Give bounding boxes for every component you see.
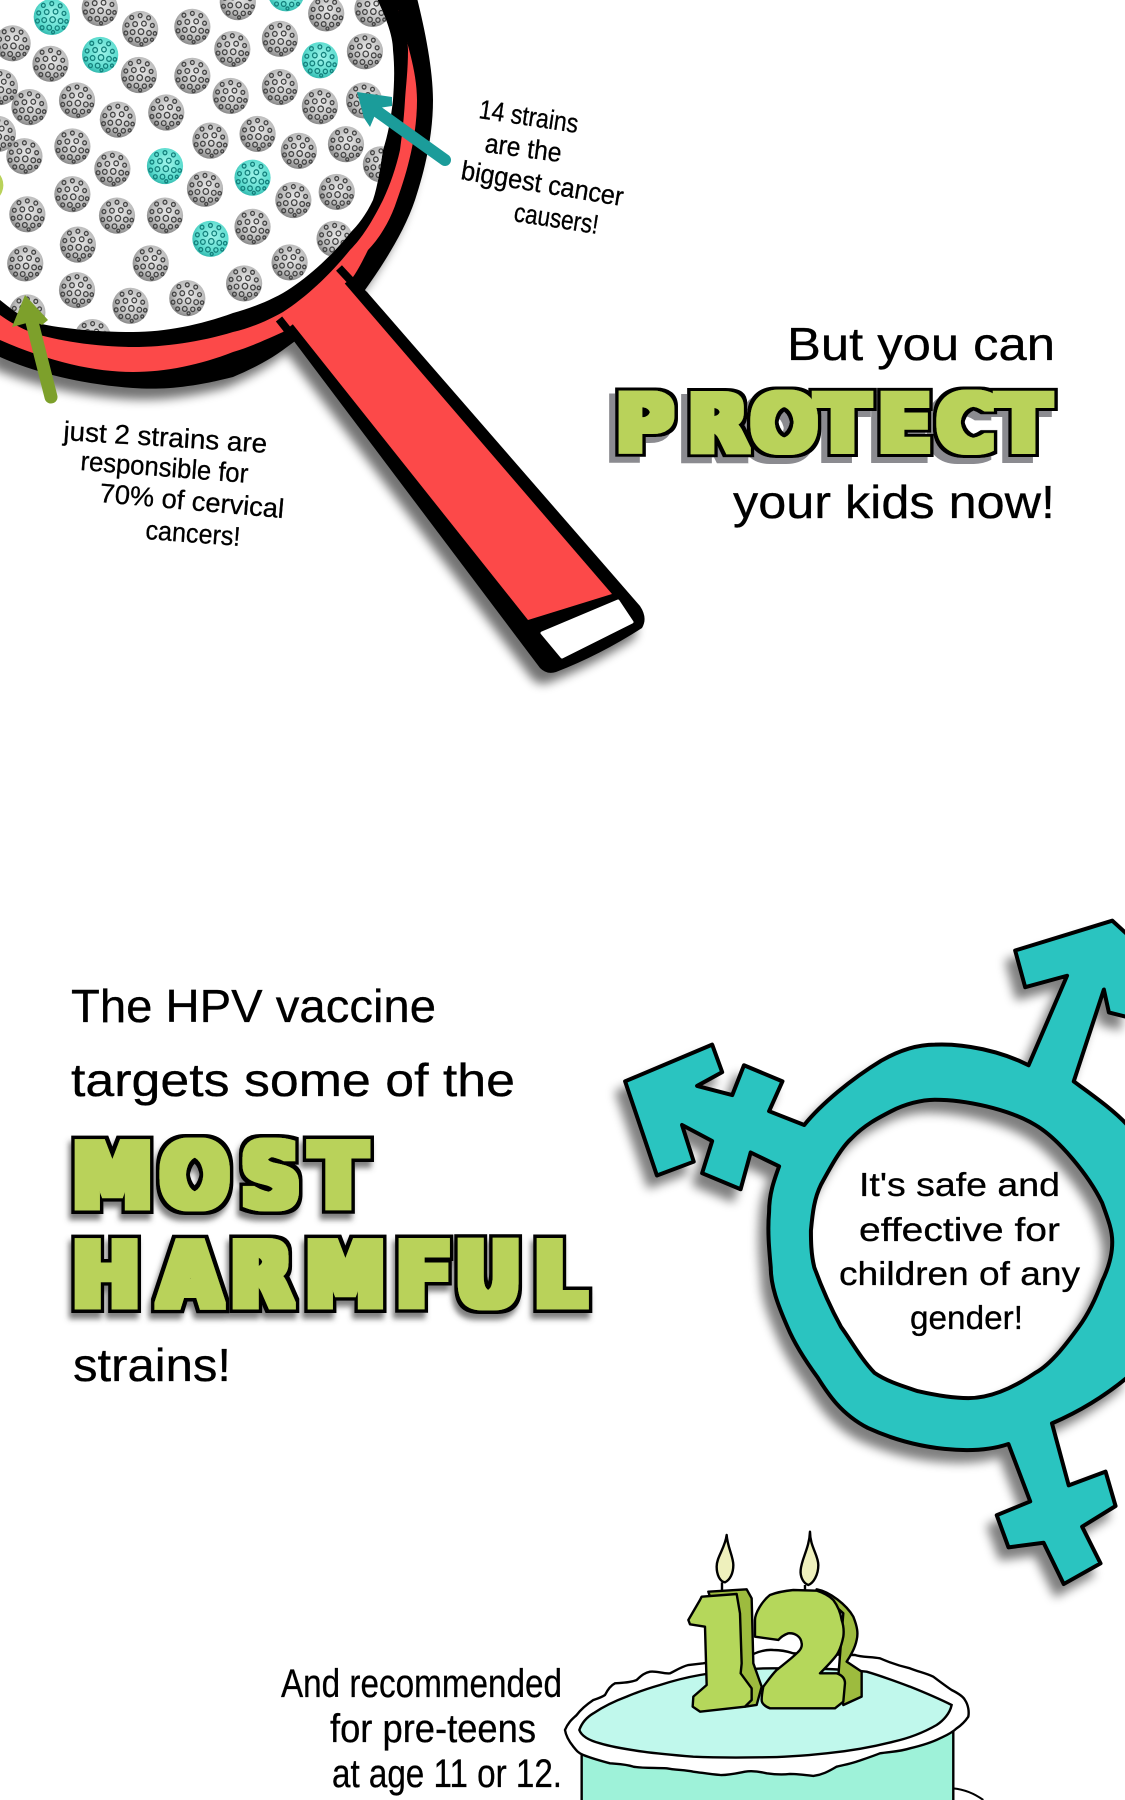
- icon: transgender symbol: [625, 921, 1125, 1584]
- icon: birthday cake with 12 candles: [565, 1532, 983, 1800]
- callout: just 2 strains: responsible for: [80, 446, 249, 489]
- text: safe and effective: It's safe and: [859, 1166, 1060, 1203]
- heading: but you can protect: [616, 318, 1055, 528]
- heading: most harmful strains: MOST: [73, 1125, 365, 1228]
- heading: most harmful strains: HARMFUL: [73, 1224, 585, 1327]
- heading: most harmful strains: The HPV vaccine: [71, 980, 436, 1032]
- callout: just 2 strains: 70% of cervical: [98, 478, 285, 524]
- text: safe and effective: children of any: [839, 1255, 1081, 1292]
- callout: 14 strains: are the: [483, 128, 563, 168]
- magnifying glass: [0, 0, 645, 673]
- heading: but you can protect: your kids now!: [733, 476, 1055, 528]
- callout: just 2 strains: just 2 strains are: [62, 416, 268, 459]
- virus strains inside lens: [0, 0, 399, 355]
- text: recommended for pre-teens: for pre-teens: [330, 1707, 536, 1751]
- heading: most harmful strains: [71, 980, 585, 1391]
- heading: but you can protect: PROTECT: [616, 380, 1050, 470]
- text: recommended for pre-teens: at age 11 or 12.: [332, 1752, 562, 1796]
- callout: 14 strains: 14 strains: [477, 94, 580, 139]
- callout: just 2 strains: cancers!: [145, 515, 242, 552]
- callout: just 2 strains: [62, 416, 285, 552]
- text: safe and effective: effective for: [859, 1211, 1060, 1248]
- candles shaped as 12: [688, 1532, 862, 1712]
- arrow: teal pointing to strain: [357, 92, 445, 160]
- text: safe and effective: [839, 1166, 1081, 1336]
- arrow: green pointing to strain: [12, 295, 51, 397]
- text: recommended for pre-teens: [281, 1662, 562, 1796]
- heading: but you can protect: But you can: [787, 318, 1055, 370]
- heading: most harmful strains: targets some of the: [71, 1054, 515, 1106]
- text: safe and effective: gender!: [910, 1299, 1023, 1336]
- callout: 14 strains: biggest cancer: [459, 155, 626, 212]
- heading: most harmful strains: strains!: [73, 1339, 231, 1391]
- lens and handle body: [0, 0, 645, 673]
- cake layers: [565, 1650, 983, 1800]
- callout: 14 strains: [459, 94, 626, 240]
- callout: 14 strains: causers!: [512, 197, 601, 240]
- text: recommended for pre-teens: And recommended: [281, 1662, 562, 1706]
